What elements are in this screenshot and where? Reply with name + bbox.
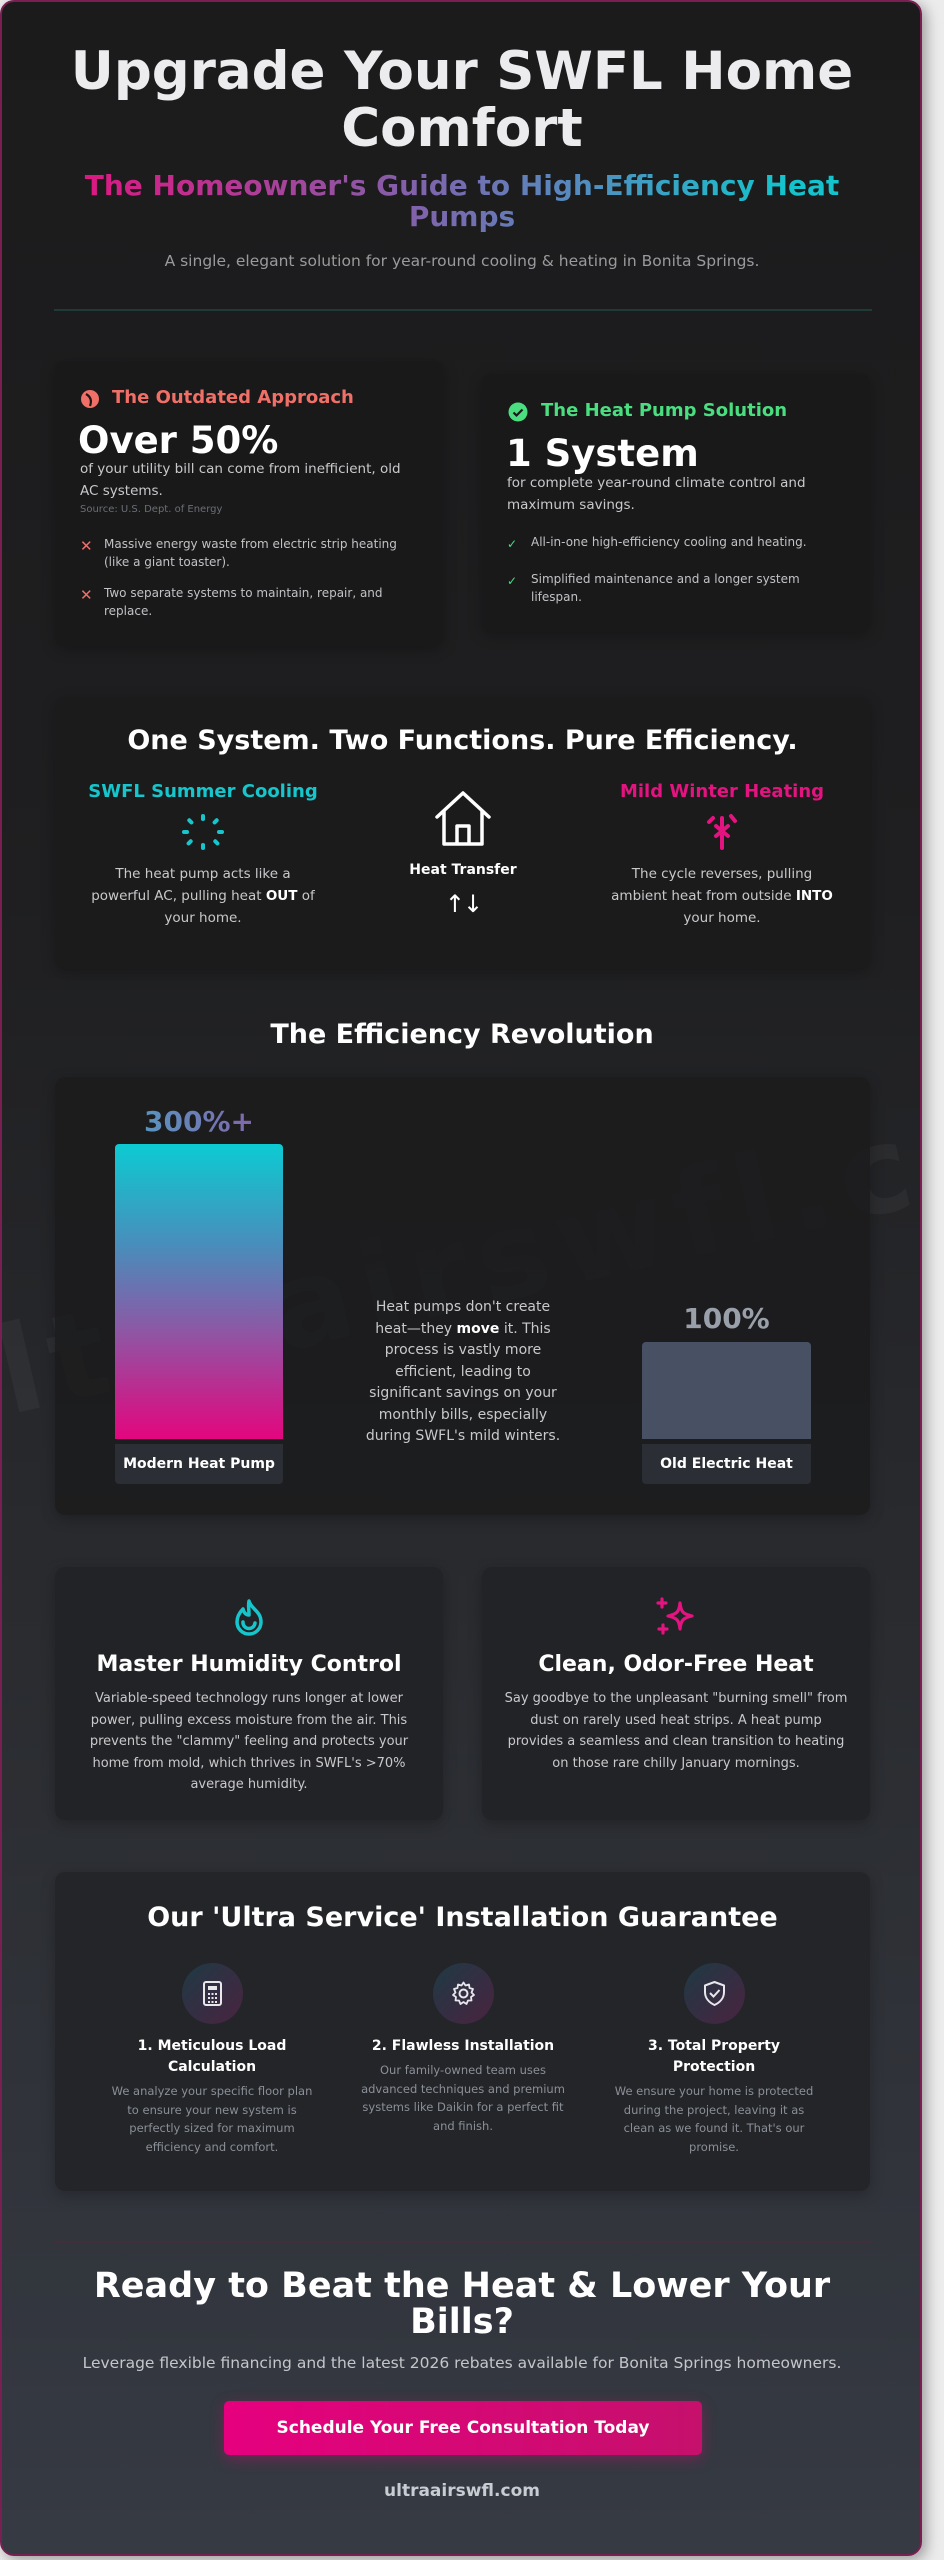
step 1: 1. Meticulous Load Calculation <box>138 2038 286 2075</box>
icon: shield check <box>684 1963 744 2024</box>
website: ultraairswfl.com <box>384 2481 540 2501</box>
heading: One System. Two Functions. Pure Efficiency. <box>127 725 798 756</box>
bullets: ✕ <box>80 537 93 555</box>
subtitle: The Homeowner's Guide to High-Efficiency Heat Pumps <box>85 169 839 233</box>
step 3 <box>615 1963 813 2154</box>
bar: modern heat pump: 300%+ <box>144 1105 254 1138</box>
panel: efficiency chart <box>55 1077 870 1515</box>
panel: humidity control: Variable-speed technology runs longer at lower power, pulling excess moisture from the air. This prevents the "clammy" feeling and protects your home from mold, which thrives in SWFL's >70% average humidity. <box>90 1691 408 1792</box>
bullets <box>507 535 807 604</box>
icon: warning circle <box>81 390 99 408</box>
bar: old electric heat <box>642 1302 811 1484</box>
bullets: Massive energy waste from electric strip heating (like a giant toaster). <box>104 537 397 569</box>
title: Upgrade Your SWFL Home <box>71 41 853 102</box>
panel: outdated approach: Source: U.S. Dept. of Energy <box>80 504 222 515</box>
title <box>71 41 853 159</box>
CTA button: Schedule Your Free Consultation Today <box>276 2418 650 2438</box>
column: heat transfer: Heat Transfer <box>409 862 517 878</box>
stat: Over 50% <box>78 419 278 462</box>
step 2: Our family-owned team uses advanced techniques and premium systems like Daikin for a perfect fit and finish. <box>361 2063 565 2132</box>
icon: check circle <box>508 402 528 422</box>
column: cooling: SWFL Summer Cooling <box>88 781 318 802</box>
bullets: Simplified maintenance and a longer system lifespan. <box>531 572 800 604</box>
bar: modern heat pump <box>115 1105 283 1484</box>
icon: house <box>435 791 491 846</box>
CTA heading: Ready to Beat the Heat & Lower Your Bills? <box>94 2266 830 2342</box>
step 1: We analyze your specific floor plan to ensure your new system is perfectly sized for maximum efficiency and comfort. <box>112 2084 312 2154</box>
heading: efficiency revolution: The Efficiency Revolution <box>270 1019 654 1050</box>
arrows: ↑↓ <box>445 890 481 918</box>
bullets: ✕ <box>80 586 93 604</box>
heading: outdated: The Outdated Approach <box>112 387 354 408</box>
CTA subtext: Leverage flexible financing and the latest 2026 rebates available for Bonita Springs homeowners. <box>83 2354 841 2372</box>
icon: calculator <box>182 1963 242 2024</box>
column: heating: The cycle reverses, pulling ambient heat from outside INTO your home. <box>611 866 833 926</box>
heading: Our 'Ultra Service' Installation Guarantee <box>147 1902 778 1933</box>
step 1 <box>112 1963 312 2154</box>
panel: outdated approach <box>55 361 443 646</box>
bullets <box>80 537 397 618</box>
icon: flame drop <box>235 1599 263 1636</box>
icon: gear <box>432 1963 494 2024</box>
column: heating <box>611 781 833 926</box>
bullets: ✓ <box>507 537 517 551</box>
step 2 <box>361 1963 565 2132</box>
panel: humidity control: Master Humidity Control <box>96 1652 402 1677</box>
bullets: Two separate systems to maintain, repair, and replace. <box>104 586 383 618</box>
step 3: We ensure your home is protected during the project, leaving it as clean as we found it. That's our promise. <box>615 2084 813 2154</box>
panel: odor-free heat: Say goodbye to the unpleasant "burning smell" from dust on rarely used heat strips. A heat pump provides a seamless and clean transition to heating on those rare chilly January mornings. <box>505 1691 847 1770</box>
panel: humidity control <box>55 1567 443 1820</box>
step 3: 3. Total Property Protection <box>648 2038 780 2075</box>
CTA button <box>224 2401 702 2455</box>
icon: cooling dots <box>182 814 224 850</box>
panel: odor-free heat: Clean, Odor-Free Heat <box>538 1652 814 1677</box>
bar: modern heat pump: Modern Heat Pump <box>123 1456 275 1472</box>
title: Comfort <box>341 98 583 159</box>
column: cooling: powerful AC, pulling heat OUT of your home. <box>91 888 315 926</box>
step 2: 2. Flawless Installation <box>372 2038 554 2054</box>
explanation text: Heat pumps don't create heat—they move it. This process is vastly more efficient, leading to significant savings on your monthly bills, especially during SWFL's mild winters. <box>366 1299 560 1444</box>
column: heating: Mild Winter Heating <box>620 781 824 802</box>
icon: sparkles <box>656 1597 694 1635</box>
tagline: A single, elegant solution for year-round cooling & heating in Bonita Springs. <box>165 252 759 270</box>
description: for complete year-round climate control and maximum savings. <box>507 475 806 513</box>
bar: old electric heat: 100% <box>683 1302 770 1335</box>
column: heat transfer <box>409 791 517 918</box>
panel: heat pump solution <box>482 374 870 632</box>
heading: solution: The Heat Pump Solution <box>541 400 787 421</box>
panel: odor-free heat <box>482 1567 870 1820</box>
column: cooling <box>88 781 318 926</box>
bullets: ✓ <box>507 574 517 588</box>
panel: two functions <box>55 697 870 969</box>
description: of your utility bill can come from inefficient, old AC systems. <box>80 461 401 499</box>
icon: heating <box>706 814 738 850</box>
stat: 1 System <box>506 432 699 475</box>
bar: old electric heat: Old Electric Heat <box>660 1456 793 1472</box>
panel: installation guarantee <box>55 1872 870 2191</box>
column: cooling: The heat pump acts like a <box>115 866 291 882</box>
bullets: All-in-one high-efficiency cooling and heating. <box>531 535 807 549</box>
